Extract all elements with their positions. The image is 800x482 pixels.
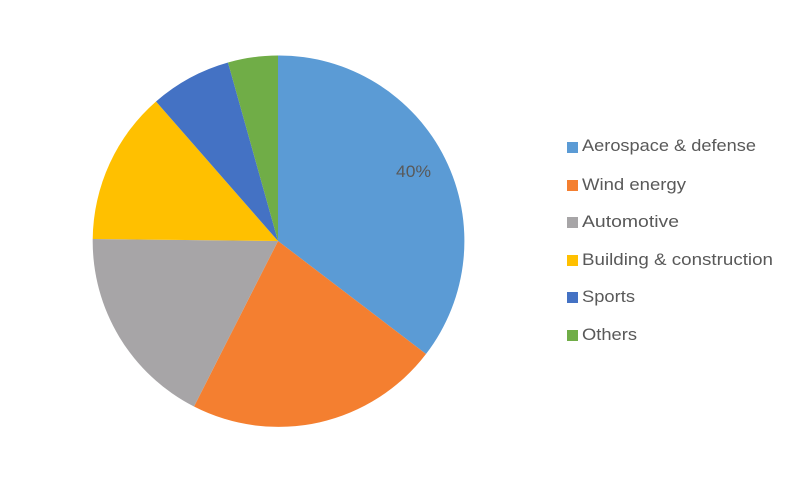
slice: Sports (156, 62, 278, 241)
legend item: Automotive: Automotive (582, 212, 679, 231)
slice: Building & construction (93, 102, 278, 241)
legend item: Building & construction: Building & construction (582, 250, 773, 269)
legend item: Aerospace & defense: Aerospace & defense (582, 136, 756, 155)
slice: Wind energy (194, 241, 426, 427)
legend item: Wind energy: Wind energy (582, 175, 687, 194)
data label: 40%: 40% (396, 162, 431, 181)
slice: Others (228, 56, 278, 241)
legend item: Others: Others (582, 325, 637, 344)
pie chart (93, 55, 464, 427)
legend item: Sports: Sports (582, 287, 635, 306)
slice: Aerospace & defense (278, 55, 464, 354)
slice: Automotive (93, 239, 278, 406)
legend (567, 136, 773, 344)
